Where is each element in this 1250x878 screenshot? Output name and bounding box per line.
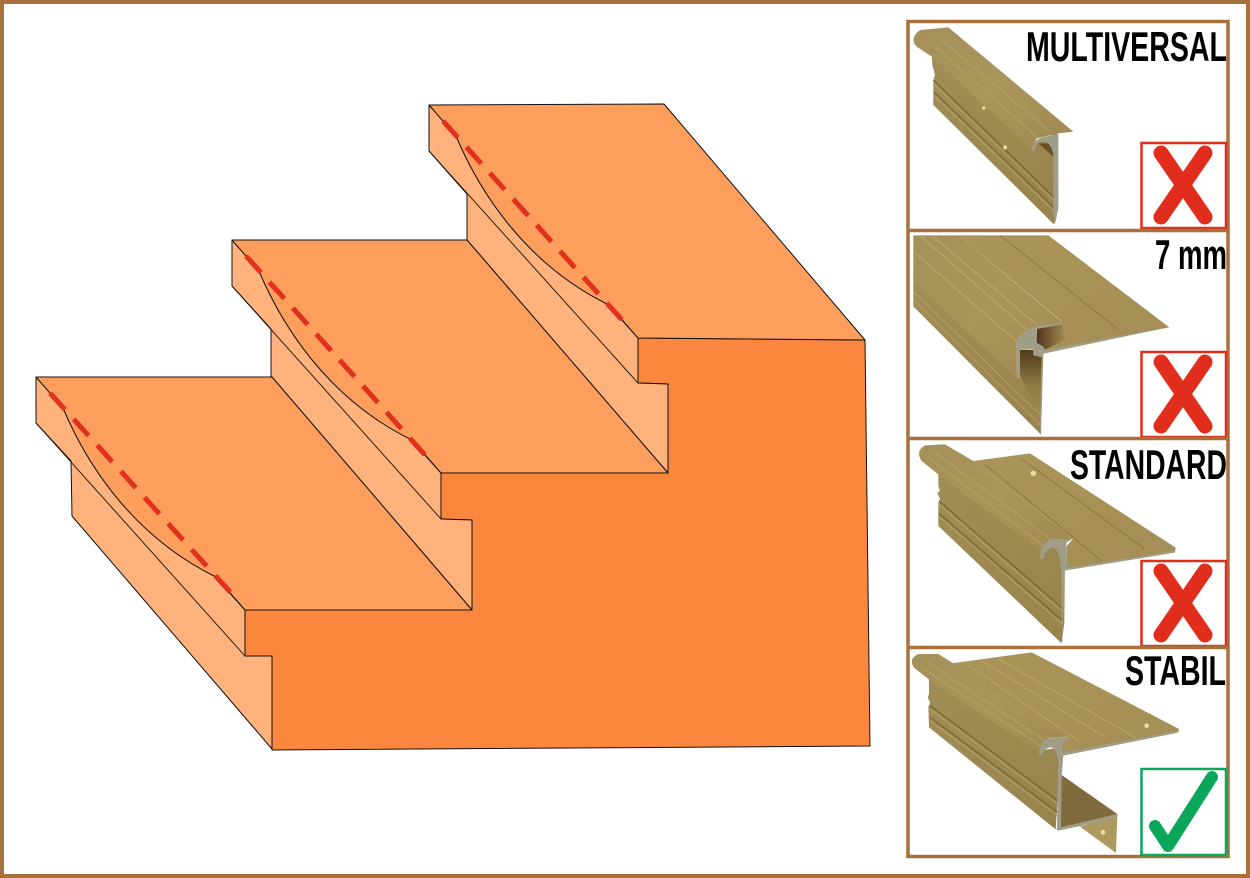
red dashed line: lower step (50, 393, 231, 593)
lower tread (36, 377, 472, 610)
middle tread (232, 240, 668, 473)
lower step side (36, 377, 272, 749)
panel: 7 mm (913, 231, 1227, 437)
nosing edge lines (36, 151, 638, 656)
divider (907, 229, 1228, 232)
red X badge (1142, 561, 1226, 646)
red X badge (1142, 143, 1226, 228)
divider (907, 646, 1228, 649)
profile image: multiversal (914, 27, 1073, 224)
staircase front face (245, 338, 870, 750)
top step side (429, 105, 668, 473)
middle step side (232, 240, 472, 610)
profile image: stabil (912, 652, 1179, 853)
panel frame (908, 22, 1228, 856)
panel: MULTIVERSAL (914, 23, 1227, 228)
red dashed line: top step (443, 121, 622, 320)
divider (907, 437, 1228, 440)
profile image: standard (919, 444, 1176, 643)
profile image: 7 mm (913, 235, 1169, 435)
staircase illustration (36, 104, 870, 750)
panel: STABIL (912, 647, 1226, 855)
product comparison column (907, 22, 1228, 856)
red X badge (1142, 352, 1226, 437)
red dashed line: middle step (246, 256, 425, 455)
panel: STANDARD (919, 441, 1227, 646)
green check badge (1142, 769, 1226, 855)
top tread (429, 104, 865, 340)
